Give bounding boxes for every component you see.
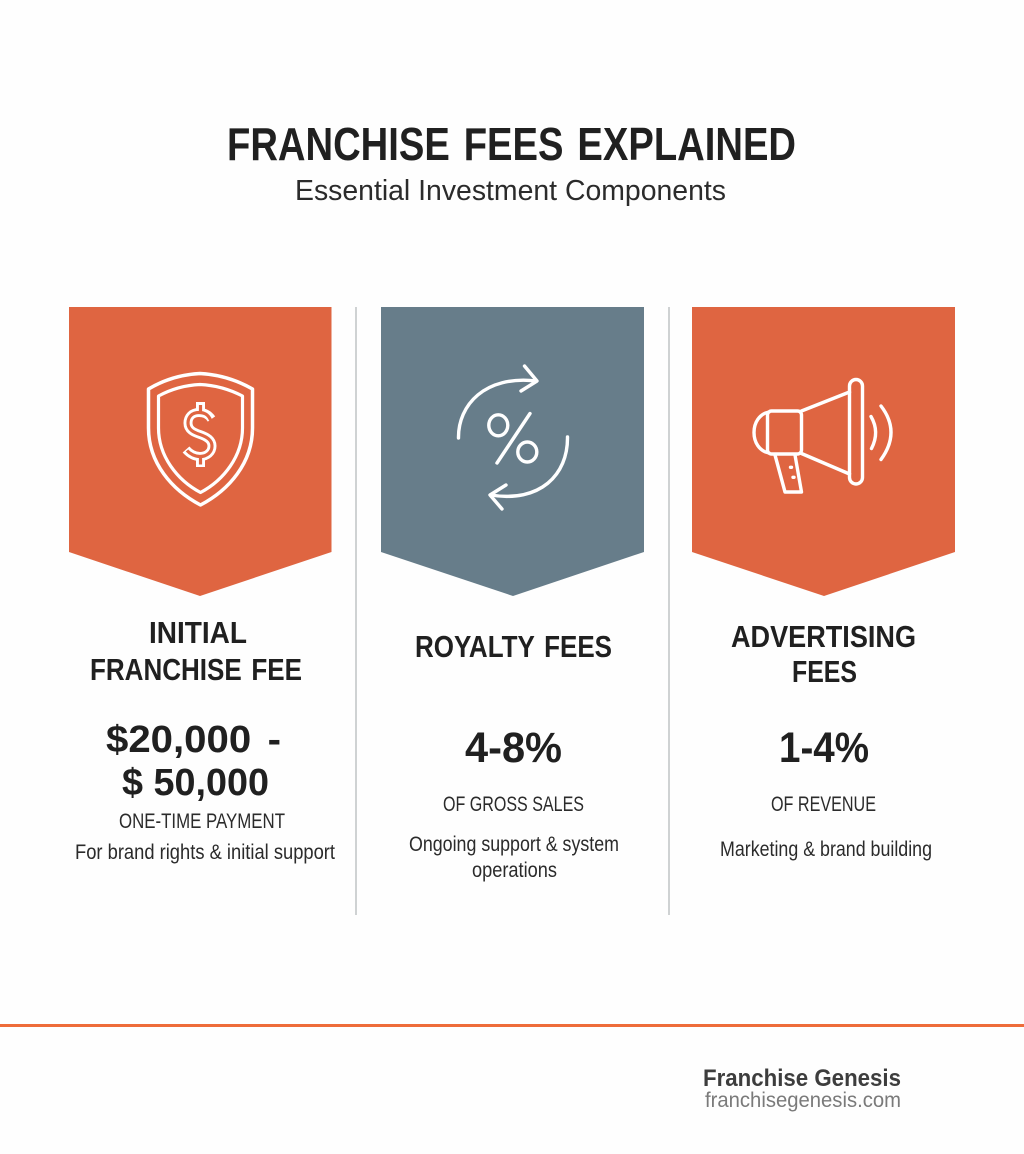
heading: initial franchise fee: FRANCHISE FEE — [90, 652, 302, 687]
amount: $20,000 - $50,000 — [106, 719, 281, 804]
icon: shield with dollar — [148, 374, 252, 505]
banner: initial fee — [69, 307, 332, 596]
icon: percent with cycle arrows — [458, 366, 568, 509]
label: of gross sales: OF GROSS SALES — [443, 793, 584, 816]
description: ongoing support: operations — [472, 859, 557, 882]
icon: megaphone — [754, 380, 891, 492]
brand url: franchisegenesis.com — [705, 1089, 901, 1112]
banner: advertising — [692, 307, 955, 596]
description: marketing: Marketing & brand building — [720, 838, 932, 861]
heading: advertising fees — [731, 619, 916, 689]
amount: $20,000 - $50,000: $20,000 - — [106, 719, 281, 761]
brand name: Franchise Genesis — [703, 1065, 901, 1092]
subtitle: Essential Investment Components — [295, 175, 726, 207]
description: ongoing support: Ongoing support & system — [409, 833, 619, 856]
heading: advertising fees: ADVERTISING — [731, 619, 916, 654]
heading: initial franchise fee: INITIAL — [149, 615, 247, 650]
label: one-time payment: ONE-TIME PAYMENT — [119, 810, 285, 833]
panel: initial franchise fee — [69, 307, 335, 864]
amount: $20,000 - $50,000: $ 50,000 — [122, 762, 269, 804]
heading: initial franchise fee — [90, 615, 302, 687]
panel: royalty fees — [381, 307, 644, 882]
description: brand rights: For brand rights & initial support — [75, 841, 335, 864]
banner: royalty — [381, 307, 644, 596]
title: FRANCHISE FEES EXPLAINED — [227, 118, 796, 170]
footer rule — [0, 1024, 1024, 1027]
panel: advertising fees — [692, 307, 955, 861]
label: of revenue: OF REVENUE — [771, 793, 876, 816]
description: ongoing support — [409, 833, 619, 882]
heading: advertising fees: FEES — [792, 654, 857, 689]
amount: 4-8%: 4-8% — [465, 724, 562, 772]
amount: 1-4%: 1-4% — [779, 724, 869, 772]
footer brand — [703, 1065, 901, 1112]
heading: royalty fees: ROYALTY FEES — [415, 629, 612, 664]
